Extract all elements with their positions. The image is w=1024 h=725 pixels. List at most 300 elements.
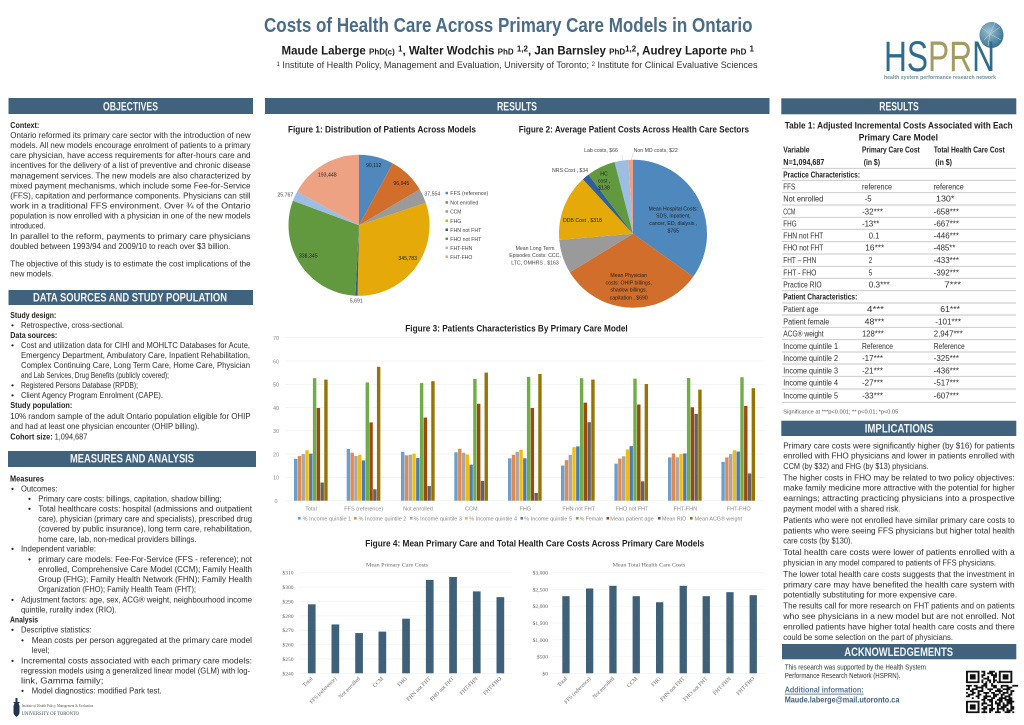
affiliations: Institute for Clinical Evaluative Sciences bbox=[595, 60, 758, 70]
text block: implications: primary care may have benefited the health care system with bbox=[783, 579, 1015, 589]
text block: context: introduced. bbox=[10, 221, 45, 231]
affiliations: 1 bbox=[276, 62, 281, 68]
legend: figure 3: Mean RIO bbox=[662, 516, 686, 522]
logo: HSPRN: HSPRN bbox=[884, 33, 995, 81]
authors: , Audrey Laporte bbox=[636, 46, 727, 58]
text block: analysis: link, Gamma family; bbox=[21, 675, 103, 685]
bar chart: patient characteristics: 10 bbox=[273, 476, 279, 482]
text block: implications: earnings; attracting practicing physicians into a prospective bbox=[783, 493, 1015, 503]
legend: figure 1: FHG bbox=[450, 219, 461, 225]
pie chart: costs by sector: Mean Physician bbox=[610, 273, 647, 279]
heading: results centre: RESULTS bbox=[497, 102, 537, 114]
text block: context: Ontario reformed its primary care sector with the introduction of new bbox=[10, 130, 251, 140]
table: adjusted incremental costs: Variable bbox=[783, 145, 810, 155]
panel: data sources and study population bbox=[8, 290, 253, 441]
affiliations: 2 bbox=[592, 62, 596, 68]
text block: implications: who see physicians in a new model but are not enrolled. Not bbox=[782, 611, 1015, 621]
pie chart: costs by sector: NRS Cost , $34 bbox=[552, 168, 588, 174]
legend: figure 3: Mean ACG® weight bbox=[695, 515, 743, 522]
text block: implications: care costs (by $130). bbox=[783, 536, 853, 546]
text block: measures: • bbox=[11, 483, 14, 493]
pie chart: distribution of patients: 345,783 bbox=[398, 256, 417, 262]
text block: data sources: Cost and utilization data for CIHI and MOHLTC Databases for Acute, bbox=[21, 340, 250, 350]
table: adjusted incremental costs: 130* bbox=[936, 194, 955, 204]
table: adjusted incremental costs: 5 bbox=[869, 267, 872, 277]
heading: results centre bbox=[265, 98, 770, 114]
bar chart: mean total health care costs: FFS (reference) bbox=[563, 675, 593, 705]
table: adjusted incremental costs: 2,947*** bbox=[934, 329, 963, 339]
text block: analysis: regression models using a generalized linear model (GLM) with log- bbox=[21, 665, 250, 675]
text block: data sources: Complex Continuing Care, Long Term Care, Home Care, Physician bbox=[21, 360, 250, 370]
legend: figure 1: FHN not FHT bbox=[450, 228, 482, 234]
table: adjusted incremental costs: reference bbox=[934, 182, 964, 192]
bar chart: patient characteristics: CCM bbox=[465, 507, 478, 513]
table: adjusted incremental costs: 16*** bbox=[865, 243, 885, 253]
text block: context bbox=[9, 120, 251, 278]
pie chart: costs by sector: cancer, ED, dialysis , bbox=[649, 221, 697, 227]
text block: implications: make family medicine more attractive with the potential for higher bbox=[783, 483, 1015, 493]
icon: crest bbox=[14, 698, 20, 717]
legend: figure 3: % Income quintile 4 bbox=[469, 516, 517, 522]
text block: measures: Outcomes: bbox=[21, 483, 58, 493]
bar chart: mean primary care costs: $310 bbox=[282, 570, 294, 577]
legend: figure 1: CCM bbox=[450, 210, 461, 216]
text block: data sources: Cohort size: 1,094,687 bbox=[10, 431, 87, 441]
affiliations: Institute of Health Policy, Management and Evaluation, University of Toronto; bbox=[280, 60, 592, 70]
bar chart: mean total health care costs: CCM bbox=[626, 676, 639, 689]
pie chart: distribution of patients: 37,554 bbox=[424, 192, 440, 198]
bar chart: mean primary care costs: FHN not FHT bbox=[406, 676, 433, 703]
bar chart: mean total health care costs: $2,500 bbox=[533, 586, 548, 594]
text block: measures: Measures bbox=[10, 473, 44, 483]
bar chart: mean primary care costs: Mean Primary Care Costs bbox=[366, 562, 428, 568]
pie chart: distribution of patients: 338,345 bbox=[299, 254, 318, 260]
text block: context: Context: bbox=[10, 120, 39, 130]
authors: 1 bbox=[398, 44, 403, 54]
panel: acknowledgements bbox=[782, 644, 1018, 712]
text block: implications: Total health care costs were lower of patients enrolled with a bbox=[783, 547, 1015, 557]
heading: measures and analysis: MEASURES AND ANALYSIS bbox=[70, 454, 194, 466]
text block: data sources: • bbox=[11, 390, 14, 400]
pie chart: costs by sector: shadow billings, bbox=[610, 288, 647, 294]
table: adjusted incremental costs: Income quintile 4 bbox=[783, 378, 838, 388]
table: adjusted incremental costs: N=1,094,687 bbox=[783, 157, 824, 167]
legend: figure 3: Mean patient age bbox=[610, 516, 654, 522]
table: adjusted incremental costs: CCM bbox=[783, 206, 795, 216]
panel: figure 3 bar chart bbox=[273, 323, 764, 522]
heading: measures and analysis bbox=[8, 451, 256, 467]
table: adjusted incremental costs: Reference bbox=[934, 341, 965, 351]
table: adjusted incremental costs: Patient Characteristics: bbox=[783, 292, 857, 302]
bar chart: mean primary care costs: $270 bbox=[282, 627, 294, 634]
table: adjusted incremental costs: -27*** bbox=[862, 378, 884, 388]
pie chart: costs by sector bbox=[509, 148, 707, 308]
legend: figure 1: FHT-FHO bbox=[450, 255, 472, 261]
panel: objectives bbox=[8, 98, 253, 278]
text block: analysis: Model diagnostics: modified Park test. bbox=[32, 685, 162, 695]
table: adjusted incremental costs: -607*** bbox=[934, 390, 960, 400]
text block: data sources bbox=[10, 310, 251, 441]
legend: figure 3: % Income quintile 1 bbox=[303, 516, 351, 522]
pie chart: distribution of patients: 90,112 bbox=[366, 163, 382, 169]
legend: figure 3 bbox=[298, 515, 743, 522]
table: adjusted incremental costs: -446*** bbox=[934, 231, 960, 241]
heading: table 1 bbox=[785, 121, 1013, 144]
bar chart: patient characteristics: 50 bbox=[273, 383, 279, 389]
table: adjusted incremental costs: FHT - FHO bbox=[783, 267, 817, 277]
bar chart: patient characteristics: FHT-FHO bbox=[727, 507, 751, 513]
table: adjusted incremental costs: 128*** bbox=[862, 329, 884, 339]
text block: funding: Performance Research Network (HSPRN). bbox=[785, 673, 900, 680]
text block: analysis: Incremental costs associated with each primary care models: bbox=[21, 655, 252, 665]
pie chart: costs by sector: capitation , $690 bbox=[610, 295, 648, 301]
text block: data sources: Data sources: bbox=[10, 330, 57, 340]
text block: additional information: Additional information: bbox=[785, 685, 864, 695]
text block: context: new models. bbox=[10, 268, 53, 278]
table: adjusted incremental costs: -5 bbox=[865, 194, 872, 204]
icon: QR code bbox=[966, 672, 1018, 712]
heading: figure 4: Figure 4: Mean Primary Care and Total Health Care Costs Across Primary Care Models bbox=[365, 539, 704, 550]
table: adjusted incremental costs: FFS bbox=[783, 182, 795, 192]
bar chart: mean primary care costs: $290 bbox=[282, 598, 294, 605]
table note: significance: Significance at ***p<0.001; ** p<0.01; *p<0.05 bbox=[783, 410, 898, 416]
title: Costs of Health Care Across Primary Care Models in Ontario bbox=[264, 15, 752, 37]
text block: context: incentives for the delivery of a list of preventive and chronic disease bbox=[10, 160, 251, 170]
logo: University of Toronto bbox=[14, 698, 94, 717]
heading: objectives bbox=[8, 98, 253, 114]
bar chart: mean primary care costs: $280 bbox=[282, 613, 294, 620]
table: adjusted incremental costs: -101*** bbox=[935, 316, 962, 326]
table: adjusted incremental costs: FHN not FHT bbox=[783, 231, 824, 241]
bar chart: mean primary care costs: $240 bbox=[282, 670, 294, 677]
text block: measures: Total healthcare costs: hospital (admissions and outpatient bbox=[38, 504, 253, 514]
legend: figure 1: Not enrolled bbox=[450, 201, 478, 207]
table: adjusted incremental costs: -517*** bbox=[934, 378, 960, 388]
logo: University of Toronto: UNIVERSITY OF TORONTO bbox=[22, 712, 79, 717]
legend: figure 1: FHO not FHT bbox=[450, 237, 482, 243]
text block: measures: • bbox=[11, 594, 14, 604]
bar chart: mean primary care costs: Total bbox=[302, 676, 315, 688]
table: adjusted incremental costs: Practice RIO bbox=[783, 279, 822, 289]
table: adjusted incremental costs: Income quintile 3 bbox=[783, 365, 838, 375]
text block: implications: payment model with a shared risk. bbox=[783, 503, 900, 513]
bar chart: mean total health care costs: FHT-FHO bbox=[736, 676, 756, 697]
bar chart: mean total health care costs bbox=[533, 562, 765, 705]
bar chart: mean total health care costs: FHN not FHT bbox=[660, 676, 687, 703]
text block: implications: enrolled patients have higher total health care costs and there bbox=[783, 622, 1015, 632]
heading: figure 1: Figure 1: Distribution of Patients Across Models bbox=[288, 124, 476, 136]
text block: funding: This research was supported by the Health System bbox=[785, 664, 926, 672]
heading: acknowledgements: ACKNOWLEDGEMENTS bbox=[844, 647, 953, 659]
pie chart: costs by sector: cost , bbox=[598, 179, 610, 185]
text block: data sources: Retrospective, cross-sectional. bbox=[21, 320, 124, 330]
text block: analysis: • bbox=[21, 635, 24, 645]
text block: context: management services. The new models are also characterized by bbox=[10, 170, 251, 180]
text block: data sources: Client Agency Program Enrolment (CAPE). bbox=[21, 390, 163, 400]
text block: measures: • bbox=[28, 554, 31, 564]
bar chart: mean primary care costs: FFS (reference) bbox=[308, 675, 338, 705]
pie chart: costs by sector: HC bbox=[600, 171, 608, 177]
text block: implications: physician in any model compared to patients of FFS physicians. bbox=[783, 557, 996, 567]
text block: measures: • bbox=[11, 544, 14, 554]
table: adjusted incremental costs: Not enrolled bbox=[783, 194, 823, 204]
text block: data sources: • bbox=[11, 380, 14, 390]
table: adjusted incremental costs: 61*** bbox=[940, 304, 961, 314]
table: adjusted incremental costs: -33*** bbox=[862, 390, 884, 400]
heading: data sources bbox=[8, 290, 253, 305]
text block: measures: care), physician (primary care and specialists), prescribed drug bbox=[38, 514, 252, 524]
text block: data sources: • bbox=[11, 340, 14, 350]
text block: implications: The lower total health care costs suggests that the investment in bbox=[783, 569, 1015, 579]
pie chart: costs by sector: Mean Hospital Costs: bbox=[649, 207, 698, 213]
heading: figure 3: Figure 3: Patients Characteristics By Primary Care Model bbox=[405, 323, 628, 334]
bar chart: mean primary care costs: $260 bbox=[282, 642, 294, 648]
pie chart: costs by sector: ODB Cost , $318 bbox=[563, 218, 602, 224]
bar chart: patient characteristics bbox=[273, 336, 764, 513]
table: adjusted incremental costs: FHT – FHN bbox=[783, 255, 816, 265]
table: adjusted incremental costs: reference bbox=[862, 182, 892, 192]
heading: figure 2: Figure 2: Average Patient Costs Across Health Care Sectors bbox=[519, 124, 749, 136]
table: adjusted incremental costs: -21*** bbox=[862, 365, 884, 375]
text block: analysis: Descriptive statistics: bbox=[21, 625, 92, 635]
bar chart: patient characteristics: 60 bbox=[273, 359, 279, 365]
text block: analysis bbox=[10, 615, 252, 695]
pie chart: costs by sector: SDS, inpatient, bbox=[656, 214, 691, 220]
table: adjusted incremental costs: Income quintile 2 bbox=[783, 353, 838, 363]
panel: figure 1 pie chart bbox=[277, 124, 489, 305]
table: adjusted incremental costs: -32*** bbox=[862, 206, 884, 216]
table: adjusted incremental costs: Patient age bbox=[783, 304, 818, 314]
bar chart: patient characteristics: 40 bbox=[273, 406, 279, 412]
bar chart: mean total health care costs: FHO not FHT bbox=[683, 676, 710, 703]
text block: data sources: Emergency Department, Ambulatory Care, Inpatient Rehabilitation, bbox=[21, 350, 250, 360]
text block: implications: enrolled with FHO physicians and lower in patients enrolled with bbox=[783, 451, 1015, 461]
text block: measures: Organization (FHO); Family Health Team (FHT); bbox=[38, 584, 196, 594]
table: adjusted incremental costs: 2 bbox=[869, 255, 872, 265]
panel: table 1 bbox=[782, 121, 1016, 416]
table: adjusted incremental costs: 48*** bbox=[865, 316, 885, 326]
text block: analysis: Mean costs per person aggregated at the primary care model bbox=[32, 635, 252, 645]
bar chart: mean total health care costs: FHT-FHN bbox=[712, 676, 733, 697]
table: adjusted incremental costs: -485** bbox=[934, 243, 956, 253]
text block: analysis: • bbox=[21, 685, 24, 695]
text block: analysis: • bbox=[11, 655, 14, 665]
text block: measures: • bbox=[28, 493, 31, 503]
authors: PhD bbox=[609, 48, 625, 56]
table: adjusted incremental costs: Reference bbox=[862, 341, 893, 351]
table: adjusted incremental costs: -433*** bbox=[934, 255, 960, 265]
bar chart: mean primary care costs bbox=[282, 562, 512, 705]
table: adjusted incremental costs: -667*** bbox=[934, 218, 960, 228]
text block: additional information bbox=[785, 685, 900, 704]
text block: implications: The higher costs in FHO may be related to two policy objectives: bbox=[783, 472, 1015, 482]
bar chart: mean primary care costs: $250 bbox=[282, 656, 294, 663]
text block: funding bbox=[785, 664, 926, 680]
table: adjusted incremental costs: Practice Characteristics: bbox=[783, 169, 860, 179]
table: adjusted incremental costs: -13** bbox=[862, 218, 880, 228]
bar chart: patient characteristics: 70 bbox=[273, 336, 279, 342]
text block: measures: Adjustment factors: age, sex, ACG® weight, neighbourhood income bbox=[21, 594, 252, 604]
authors: 1,2 bbox=[517, 44, 529, 54]
text block: analysis: level; bbox=[32, 645, 49, 655]
text block: data sources: Study design: bbox=[10, 310, 56, 320]
pie chart: costs by sector: Mean Long Term bbox=[516, 246, 554, 252]
text block: context: mixed payment mechanisms, which include some Fee-for-Service bbox=[10, 180, 251, 190]
legend: figure 3: % Income quintile 2 bbox=[359, 516, 406, 522]
text block: implications bbox=[782, 440, 1015, 642]
text block: implications: potentially substituting for more expensive care. bbox=[783, 589, 957, 599]
text block: implications: patients who were seeing FFS physicians but higher total health bbox=[783, 525, 1015, 535]
table: adjusted incremental costs: 4*** bbox=[867, 304, 885, 314]
pie chart: costs by sector: costs: OHIP billings, bbox=[606, 280, 652, 286]
pie chart: distribution of patients: 96,945 bbox=[393, 181, 409, 187]
legend: figure 3: % Female bbox=[580, 516, 603, 522]
bar chart: patient characteristics: FHN not FHT bbox=[562, 507, 596, 513]
table: adjusted incremental costs: (in $) bbox=[935, 157, 952, 167]
bar chart: mean primary care costs: FHT-FHO bbox=[483, 676, 503, 697]
bar chart: mean total health care costs: $500 bbox=[537, 654, 548, 660]
table: adjusted incremental costs: Income quintile 1 bbox=[783, 341, 838, 351]
bar chart: patient characteristics: 20 bbox=[273, 452, 279, 458]
pie chart: costs by sector: $765 bbox=[668, 229, 679, 235]
text block: data sources: and Lab Services, Drug Benefits (publicly covered); bbox=[21, 370, 169, 380]
table: adjusted incremental costs: Primary Care Cost bbox=[862, 145, 920, 155]
text block: implications: could be some selection on the part of physicians. bbox=[783, 632, 953, 642]
bar chart: mean total health care costs: $1,000 bbox=[533, 637, 548, 644]
bar chart: mean total health care costs: $1,500 bbox=[533, 620, 548, 627]
bar chart: mean primary care costs: CCM bbox=[372, 676, 385, 689]
text block: measures: Independent variable: bbox=[21, 544, 96, 554]
table: adjusted incremental costs: -325*** bbox=[934, 353, 960, 363]
bar chart: patient characteristics: FHT-FHN bbox=[674, 507, 697, 513]
bar chart: patient characteristics: 30 bbox=[273, 429, 279, 435]
legend: figure 1: FFS (reference) bbox=[450, 191, 489, 197]
pie chart: distribution of patients: 193,448 bbox=[318, 173, 337, 179]
table: adjusted incremental costs: Income quintile 5 bbox=[783, 390, 838, 400]
pie chart: costs by sector: Episodes Costs: CCC, bbox=[509, 253, 561, 259]
text block: measures: • bbox=[28, 504, 31, 514]
pie chart: distribution of patients bbox=[277, 155, 440, 305]
text block: measures: Primary care costs: billings, capitation, shadow billing; bbox=[38, 493, 222, 503]
bar chart: mean total health care costs: $3,000 bbox=[533, 570, 548, 577]
authors: PhD bbox=[730, 48, 747, 56]
text block: context: care physician, have access requirements for after-hours care and bbox=[10, 150, 251, 160]
authors: 1 bbox=[750, 44, 755, 54]
pie chart: costs by sector: Non MD costs, $22 bbox=[634, 148, 678, 154]
text block: context: population is now enrolled with a physician in one of the new models bbox=[10, 211, 251, 221]
heading: objectives: OBJECTIVES bbox=[103, 102, 158, 114]
logo: University of Toronto: Institute of Health Policy, Management & Evaluation bbox=[22, 703, 94, 709]
bar chart: mean primary care costs: FHG bbox=[397, 676, 409, 688]
text block: data sources: Study population: bbox=[10, 400, 72, 410]
table: adjusted incremental costs: FHO not FHT bbox=[783, 243, 824, 253]
panel: figure 4 bar charts bbox=[282, 539, 765, 705]
table: adjusted incremental costs: -436*** bbox=[934, 365, 960, 375]
text block: data sources: 10% random sample of the adult Ontario population eligible for OHIP bbox=[10, 411, 251, 421]
text block: implications: Patients who were not enrolled have similar primary care costs to bbox=[783, 515, 1015, 525]
authors: 1,2 bbox=[625, 44, 637, 54]
bar chart: mean primary care costs: Not enrolled bbox=[338, 676, 362, 700]
heading: table 1: Primary Care Model bbox=[859, 133, 938, 144]
text block: measures: enrolled, Comprehensive Care Model (CCM); Family Health bbox=[38, 564, 252, 574]
text block: context: (FFS), capitation and performance components. Physicians can still bbox=[10, 191, 251, 201]
heading: implications bbox=[781, 421, 1016, 436]
table: adjusted incremental costs: -658*** bbox=[934, 206, 960, 216]
bar chart: patient characteristics: FFS (reference) bbox=[344, 507, 383, 513]
bar chart: patient characteristics: Total bbox=[305, 507, 317, 513]
text block: data sources: • bbox=[11, 320, 14, 330]
panel: implications bbox=[781, 421, 1016, 642]
bar chart: mean total health care costs: FHG bbox=[650, 676, 663, 688]
table: adjusted incremental costs: Total Health Care Cost bbox=[934, 145, 1005, 155]
table: adjusted incremental costs: 7*** bbox=[944, 279, 962, 289]
pie chart: distribution of patients: 25,767 bbox=[277, 193, 293, 199]
text block: measures: (covered by public insurance), long term care, rehabilitation, bbox=[38, 524, 252, 534]
table: adjusted incremental costs: -17*** bbox=[862, 353, 884, 363]
pie chart: distribution of patients: 5,691 bbox=[350, 299, 363, 305]
table: adjusted incremental costs: -392*** bbox=[934, 267, 960, 277]
table: adjusted incremental costs: (in $) bbox=[864, 157, 880, 167]
text block: implications: CCM (by $32) and FHG (by $13) physicians. bbox=[783, 461, 929, 471]
bar chart: mean primary care costs: $300 bbox=[282, 584, 294, 591]
text block: measures: Group (FHG); Family Health Network (FHN); Family Health bbox=[38, 574, 252, 584]
table: adjusted incremental costs: FHG bbox=[783, 218, 797, 228]
pie chart: costs by sector: LTC, OMHRS , $163 bbox=[511, 260, 559, 266]
legend: figure 1 bbox=[446, 191, 489, 261]
bar chart: patient characteristics: FHG bbox=[519, 507, 531, 513]
legend: figure 3: % Income quintile 3 bbox=[414, 516, 462, 522]
text block: measures: quintile, rurality index (RIO). bbox=[21, 605, 117, 615]
text block: context: In parallel to the reform, payments to primary care physicians bbox=[10, 231, 251, 241]
text block: measures: home care, lab, non-medical providers billings. bbox=[38, 534, 197, 544]
logo: HSPRN: health system performance research network bbox=[884, 75, 997, 81]
table: adjusted incremental costs: 0.3*** bbox=[869, 279, 890, 289]
text block: measures bbox=[10, 473, 253, 615]
text block: data sources: and had at least one physician encounter (OHIP billing). bbox=[10, 421, 199, 431]
text block: context: work in a traditional FFS environment. Over ¾ of the Ontario bbox=[9, 201, 251, 211]
panel: figure 2 pie chart bbox=[509, 124, 749, 308]
legend: figure 3: % Income quintile 5 bbox=[524, 516, 572, 522]
bar chart: patient characteristics: Not enrolled bbox=[403, 507, 433, 513]
bar chart: patient characteristics: FHO not FHT bbox=[615, 507, 649, 513]
pie chart: costs by sector: Lab costs, $66 bbox=[584, 148, 618, 154]
heading: implications: IMPLICATIONS bbox=[865, 424, 934, 436]
text block: analysis: Analysis bbox=[10, 615, 38, 625]
pie chart: costs by sector: $138 bbox=[598, 186, 610, 192]
authors: , Walter Wodchis bbox=[402, 46, 494, 58]
text block: context: The objective of this study is to estimate the cost implications of the bbox=[10, 258, 251, 268]
bar chart: mean primary care costs: FHO not FHT bbox=[429, 676, 456, 703]
authors: Maude Laberge PhD(c) bbox=[282, 46, 395, 58]
text block: context: models. All new models encourage enrolment of patients to a primary bbox=[10, 140, 251, 150]
bar chart: mean total health care costs: $0 bbox=[542, 670, 548, 677]
table: adjusted incremental costs: ACG® weight bbox=[783, 329, 824, 339]
bar chart: patient characteristics: 0 bbox=[274, 499, 278, 505]
bar chart: mean total health care costs: Total bbox=[557, 676, 569, 688]
authors: , Jan Barnsley bbox=[528, 46, 607, 58]
heading: data sources: DATA SOURCES AND STUDY POPULATION bbox=[33, 292, 227, 304]
panel: measures and analysis bbox=[8, 451, 256, 695]
table: adjusted incremental costs bbox=[782, 145, 1016, 402]
bar chart: mean total health care costs: Not enrolled bbox=[592, 676, 616, 700]
bar chart: mean primary care costs: FHT-FHN bbox=[459, 676, 480, 697]
text block: data sources: Registered Persons Database (RPDB); bbox=[21, 380, 138, 390]
text block: measures: primary care models: Fee-For-Service (FFS - reference); not bbox=[38, 554, 253, 564]
table: adjusted incremental costs: 0.1 bbox=[869, 231, 880, 241]
bar chart: mean total health care costs: Mean Total Health Care Costs bbox=[613, 562, 685, 568]
heading: acknowledgements bbox=[782, 644, 1016, 659]
authors: PhD bbox=[498, 48, 514, 56]
